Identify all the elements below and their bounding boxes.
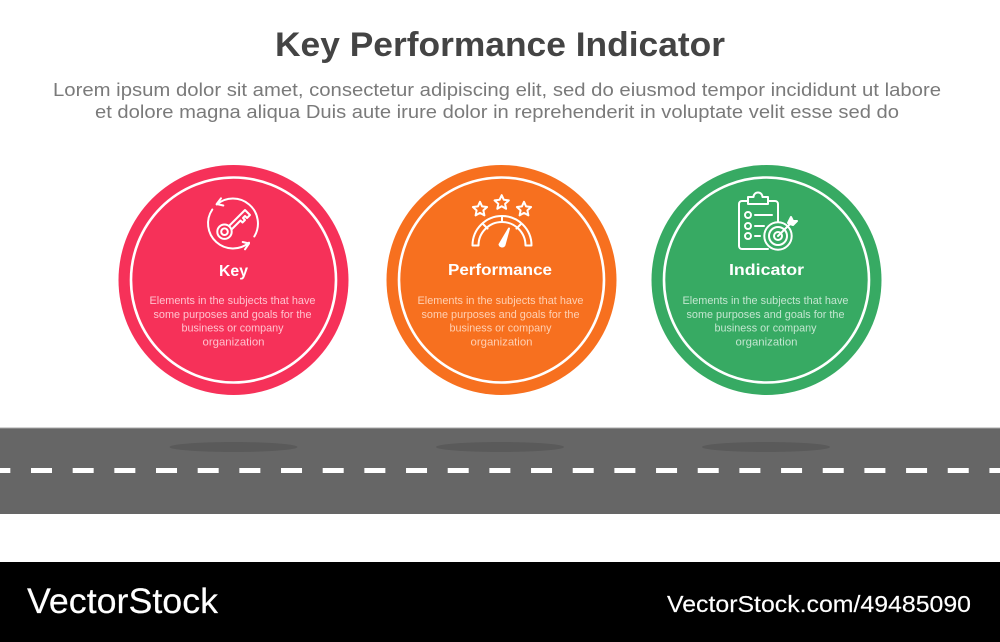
road shadow: indicator	[702, 442, 830, 452]
description: key: business or company	[182, 322, 284, 334]
footer bar	[0, 562, 1000, 642]
panel: indicator	[652, 165, 882, 395]
panel: key	[118, 165, 348, 395]
title: Key Performance Indicator	[275, 26, 725, 64]
heading: indicator: Indicator	[729, 262, 804, 279]
description: key: some purposes and goals for the	[154, 309, 312, 321]
panel: performance	[386, 165, 616, 395]
subtitle text block: et dolore magna aliqua Duis aute irure dolor in reprehenderit in voluptate velit esse sed do	[95, 101, 899, 122]
heading: performance: Performance	[448, 262, 552, 279]
icon: key with rotating arrows	[208, 198, 258, 249]
description: performance: some purposes and goals for the	[422, 309, 580, 321]
description: indicator: business or company	[714, 322, 817, 334]
description: indicator: organization	[736, 336, 798, 348]
road shadow: key	[170, 442, 298, 452]
road shadow: performance	[436, 442, 564, 452]
description: performance: organization	[470, 336, 532, 348]
road lane markings	[0, 468, 1000, 473]
road	[0, 428, 1000, 514]
description: key	[150, 295, 316, 348]
footer logo: VectorStock	[27, 582, 219, 621]
description: indicator	[682, 295, 848, 348]
description: performance: business or company	[450, 322, 552, 334]
footer image id: VectorStock.com/49485090	[667, 591, 971, 617]
subtitle text block	[53, 79, 941, 122]
icon: speedometer with stars	[472, 195, 532, 246]
description: performance	[418, 295, 584, 348]
description: indicator: Elements in the subjects that have	[682, 295, 848, 307]
heading: key: Key	[219, 263, 248, 280]
description: indicator: some purposes and goals for the	[686, 309, 844, 321]
description: performance: Elements in the subjects that have	[418, 295, 584, 307]
icon: clipboard with target	[739, 192, 797, 250]
description: key: organization	[202, 336, 264, 348]
description: key: Elements in the subjects that have	[150, 295, 316, 307]
subtitle text block: Lorem ipsum dolor sit amet, consectetur adipiscing elit, sed do eiusmod tempor incididunt ut labore	[53, 79, 941, 100]
